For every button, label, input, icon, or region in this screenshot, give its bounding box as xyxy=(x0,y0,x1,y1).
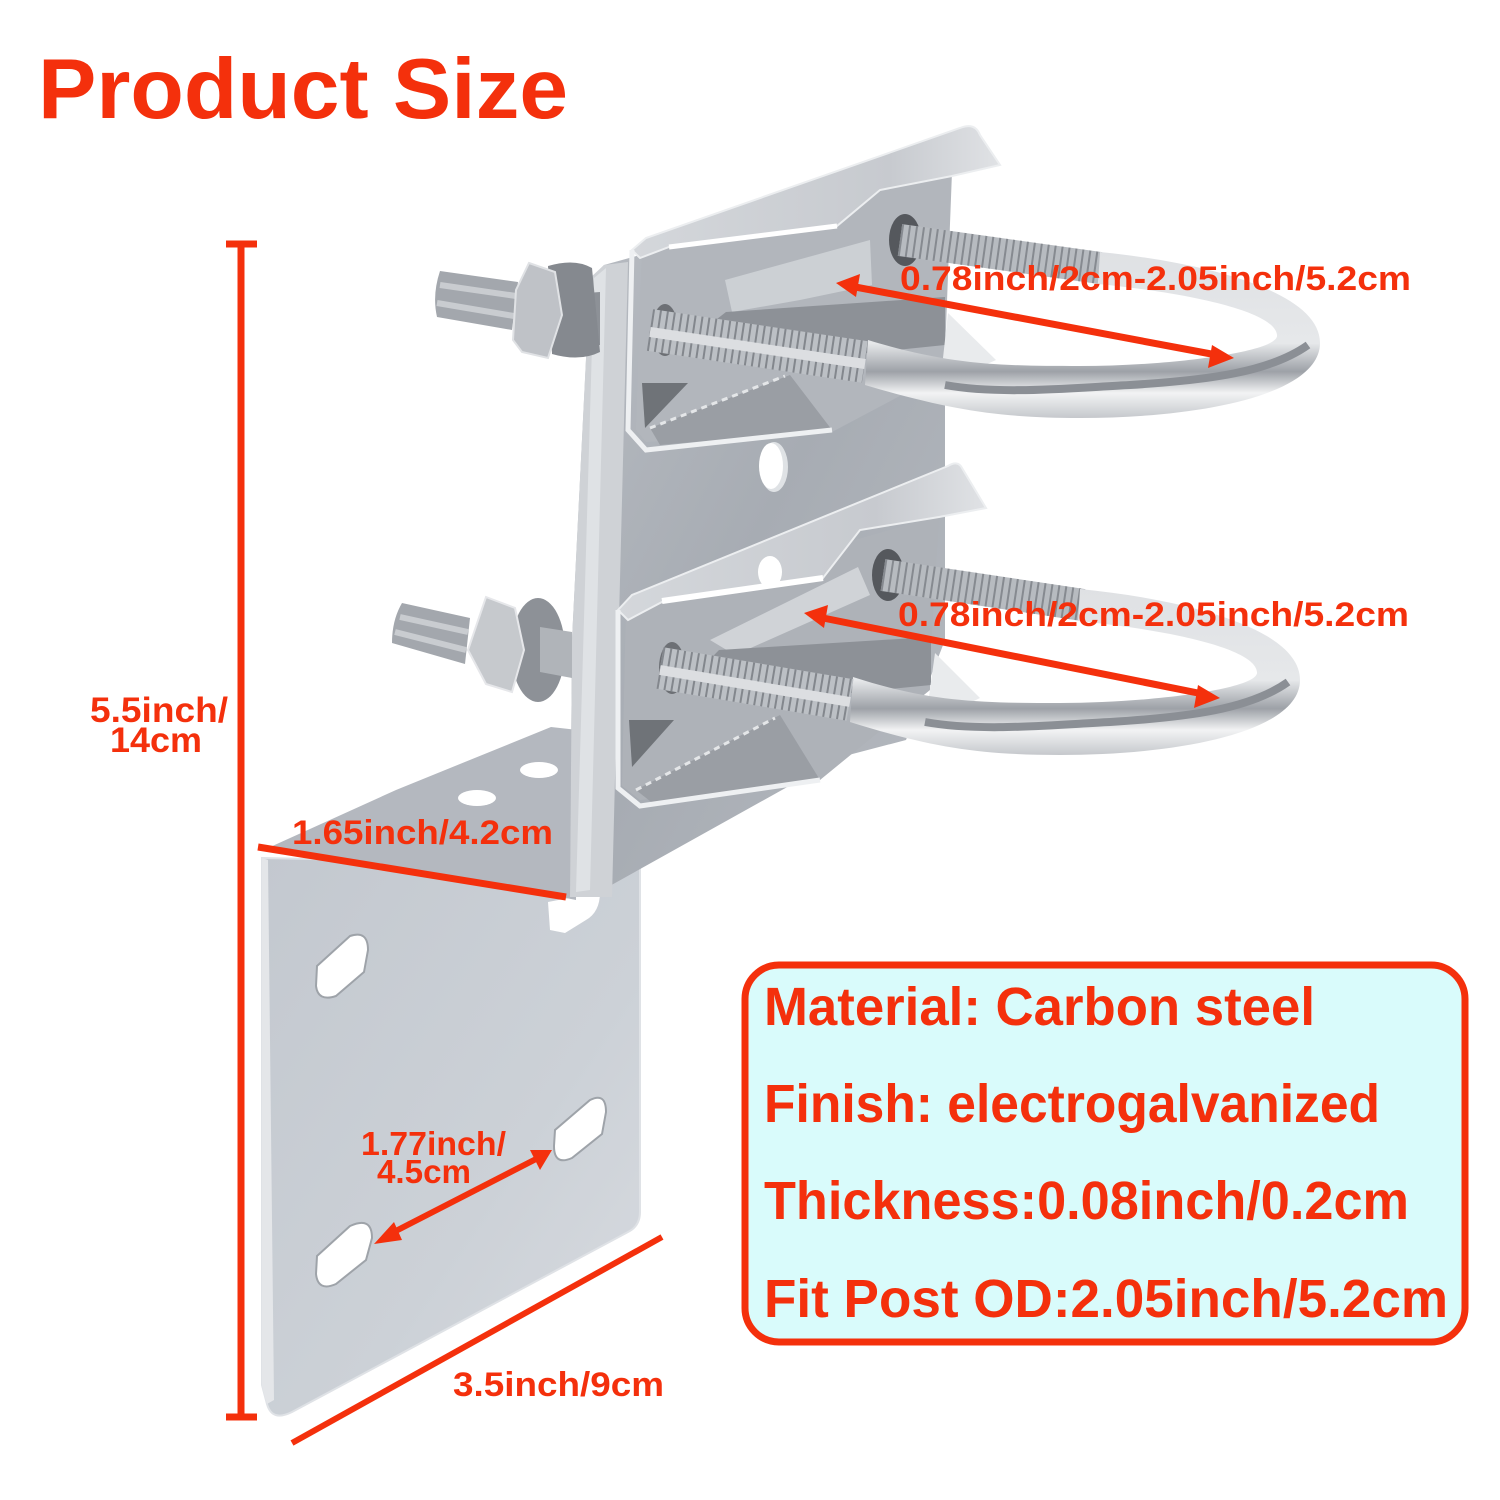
plate hole xyxy=(760,442,788,492)
flange width label: 1.65inch/4.2cm xyxy=(292,814,553,852)
lower mounting plate xyxy=(262,858,640,1416)
height label: 14cm xyxy=(110,721,202,760)
thickness: Thickness:0.08inch/0.2cm xyxy=(764,1171,1409,1231)
specifications panel xyxy=(745,965,1465,1342)
height dimension line xyxy=(226,244,257,1417)
upper U-bolt xyxy=(650,214,1320,418)
finish: Finish: electrogalvanized xyxy=(764,1074,1380,1134)
back vertical plate xyxy=(570,170,945,897)
bracket product photo xyxy=(262,126,1320,1416)
upper U-bolt label: 0.78inch/2cm-2.05inch/5.2cm xyxy=(900,260,1411,298)
lower U-bolt label: 0.78inch/2cm-2.05inch/5.2cm xyxy=(898,596,1409,634)
title: Product Size xyxy=(38,42,568,137)
upper rear stud and nut xyxy=(435,262,600,358)
upper clamp xyxy=(628,126,1000,450)
lower U-bolt xyxy=(659,549,1300,755)
material: Material: Carbon steel xyxy=(764,977,1315,1037)
height label: 5.5inch/ xyxy=(90,691,228,730)
lower rear stud and nut xyxy=(392,597,572,702)
horizontal flange xyxy=(268,727,578,900)
plate length label: 3.5inch/9cm xyxy=(453,1366,664,1404)
hole spacing label: 4.5cm xyxy=(377,1153,471,1190)
lower clamp xyxy=(618,463,986,806)
upper U-bolt dimension arrow xyxy=(836,274,1234,368)
flange width dimension line xyxy=(258,847,566,897)
lower U-bolt dimension arrow xyxy=(804,605,1220,708)
plate length dimension line xyxy=(292,1237,662,1443)
hole spacing label: 1.77inch/ xyxy=(361,1125,506,1162)
fit post: Fit Post OD:2.05inch/5.2cm xyxy=(764,1269,1448,1329)
hole spacing arrow xyxy=(374,1150,552,1244)
